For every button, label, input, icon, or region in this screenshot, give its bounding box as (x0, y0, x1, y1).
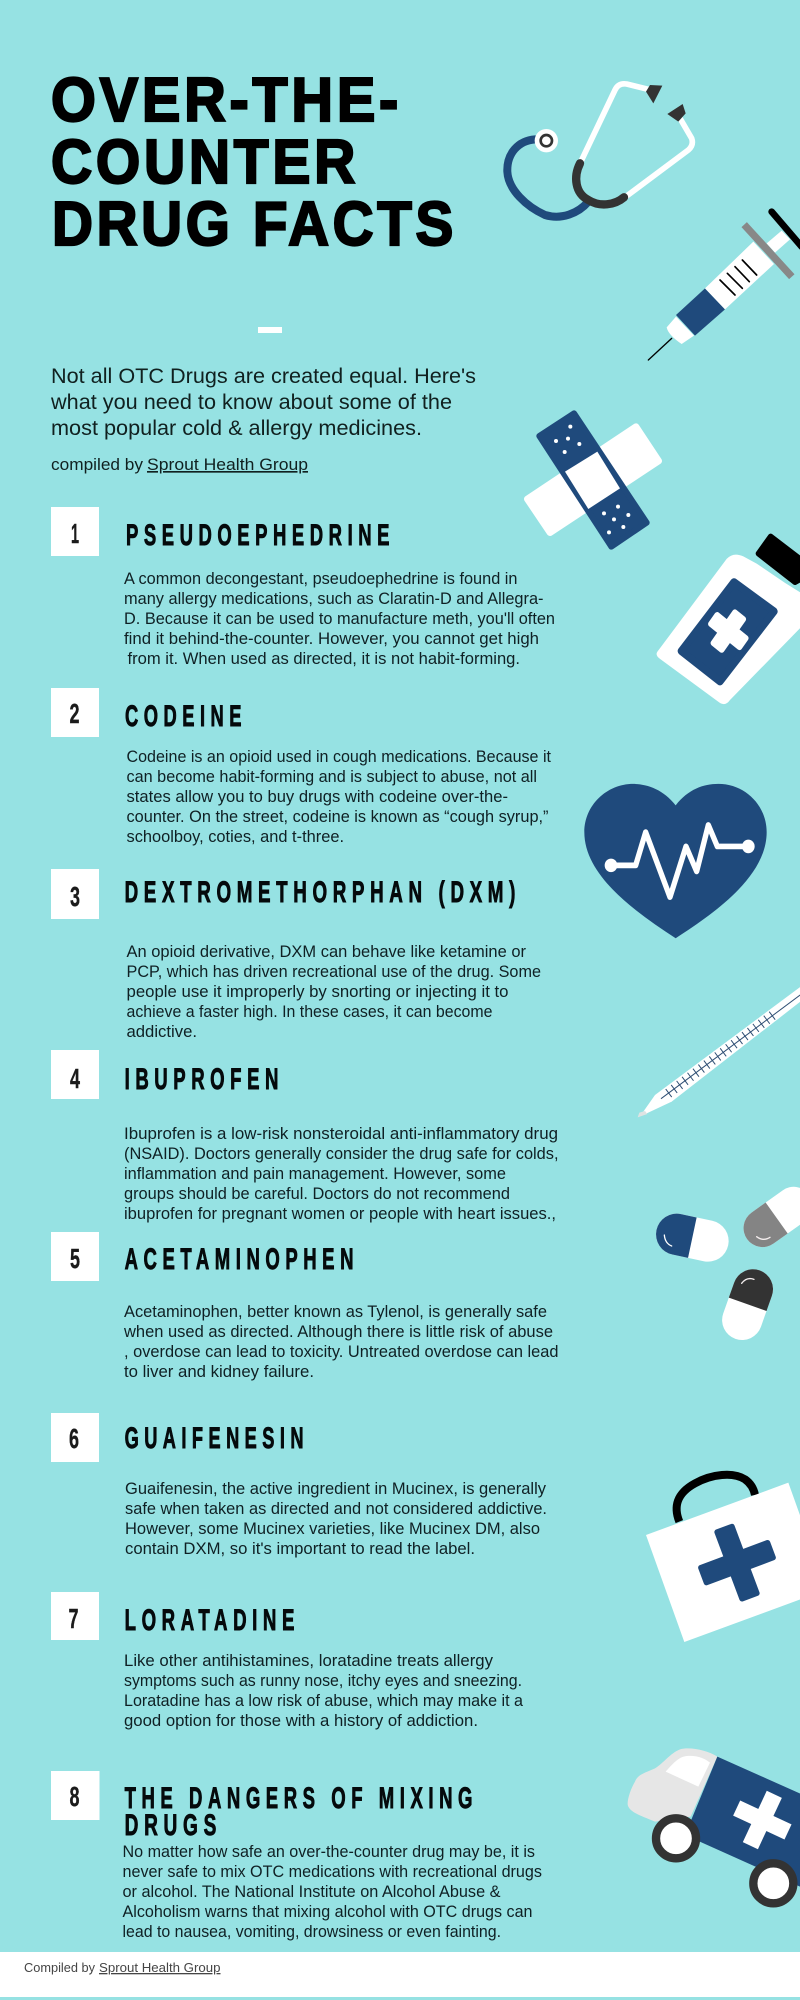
number badge 4: 4 (70, 1063, 80, 1094)
body text 4 (124, 1125, 558, 1223)
number badge 4 (51, 1050, 99, 1099)
heading 5: ACETAMINOPHEN (125, 1243, 359, 1276)
body text 8: Alcoholism warns that mixing alcohol with OTC drugs can (122, 1903, 532, 1921)
body text 5: , overdose can lead to toxicity. Untreated overdose can lead (124, 1343, 558, 1361)
body text 2: states allow you to buy drugs with codeine over-the- (126, 788, 508, 806)
number badge 5 (51, 1232, 99, 1281)
icon: grey capsule (736, 1179, 800, 1255)
body text 6: Guaifenesin, the active ingredient in Mucinex, is generally (125, 1480, 547, 1498)
heading 4: IBUPROFEN (125, 1063, 284, 1096)
body text 3: PCP, which has driven recreational use of the drug. Some (126, 963, 541, 981)
intro text: what you need to know about some of the (50, 390, 452, 414)
body text 5: when used as directed. Although there is little risk of abuse (123, 1323, 553, 1341)
body text 3: An opioid derivative, DXM can behave like ketamine or (126, 943, 526, 961)
white dash accent (258, 327, 282, 333)
title (51, 66, 457, 259)
section 7: loratadine (51, 1592, 524, 1730)
heading 3: DEXTROMETHORPHAN (DXM) (125, 876, 521, 909)
body text 5: to liver and kidney failure. (124, 1363, 314, 1381)
section 2: codeine (51, 688, 551, 846)
body text 4: (NSAID). Doctors generally consider the drug safe for colds, (124, 1145, 558, 1163)
heading 8: THE DANGERS OF MIXING (125, 1782, 478, 1815)
body text 7: Like other antihistamines, loratadine treats allergy (124, 1652, 494, 1670)
section 8: the dangers of mixing drugs (51, 1771, 542, 1941)
body text 6: However, some Mucinex varieties, like Mucinex DM, also (125, 1520, 540, 1538)
body text 8 (122, 1843, 542, 1941)
heading 6: GUAIFENESIN (125, 1422, 309, 1455)
body text 2: schoolboy, coties, and t-three. (126, 828, 344, 846)
number badge 5: 5 (70, 1243, 80, 1274)
body text 7: symptoms such as runny nose, itchy eyes and sneezing. (124, 1672, 522, 1690)
section 5: acetaminophen (51, 1232, 558, 1381)
heading 8 (125, 1782, 478, 1842)
number badge 7 (51, 1592, 99, 1640)
body text 3: achieve a faster high. In these cases, it can become (126, 1003, 492, 1021)
footer band: Sprout Health Group (99, 1960, 220, 1975)
icon: medicine bottle (657, 536, 800, 704)
heading 2: CODEINE (125, 700, 247, 733)
body text 5 (123, 1303, 558, 1381)
body text 8: No matter how safe an over-the-counter drug may be, it is (122, 1843, 535, 1861)
icon: bandage (527, 413, 659, 547)
body text 2: can become habit-forming and is subject to abuse, not all (126, 768, 537, 786)
heading 7: LORATADINE (125, 1604, 300, 1637)
icon: blue capsule (652, 1210, 732, 1266)
number badge 8: 8 (70, 1781, 80, 1812)
title: COUNTER (51, 128, 359, 197)
body text 4: inflammation and pain management. However, some (124, 1165, 506, 1183)
icon: thermometer (638, 985, 800, 1117)
body text 6 (125, 1480, 547, 1558)
heading 8: DRUGS (125, 1809, 222, 1842)
number badge 1 (51, 507, 99, 556)
number badge 2: 2 (70, 698, 80, 729)
body text 3: people use it improperly by snorting or injecting it to (126, 983, 509, 1001)
body text 1: A common decongestant, pseudoephedrine is found in (124, 570, 518, 588)
body text 6: safe when taken as directed and not considered addictive. (125, 1500, 547, 1518)
body text 2 (126, 748, 551, 846)
icon: black capsule (717, 1264, 779, 1346)
body text 1: D. Because it can be used to manufacture meth, you'll often (124, 610, 555, 628)
number badge 3: 3 (70, 881, 80, 912)
body text 3 (126, 943, 541, 1041)
title: OVER-THE- (51, 66, 402, 135)
body text 7: Loratadine has a low risk of abuse, which may make it a (124, 1692, 524, 1710)
section 6: guaifenesin (51, 1413, 547, 1558)
body text 8: or alcohol. The National Institute on Alcohol Abuse & (122, 1883, 500, 1901)
body text 1: from it. When used as directed, it is not habit-forming. (128, 650, 520, 668)
number badge 3 (51, 869, 99, 919)
body text 8: never safe to mix OTC medications with recreational drugs (122, 1863, 542, 1881)
footer band: Compiled by (24, 1960, 95, 1975)
icon: stethoscope (507, 84, 692, 217)
intro text (50, 364, 476, 440)
body text 1: many allergy medications, such as Claratin-D and Allegra- (124, 590, 544, 608)
body text 4: Ibuprofen is a low-risk nonsteroidal anti-inflammatory drug (124, 1125, 558, 1143)
number badge 1: 1 (71, 518, 79, 549)
body text 4: ibuprofen for pregnant women or people with heart issues., (124, 1205, 556, 1223)
body text 7 (124, 1652, 524, 1730)
compiled by credit: compiled by (51, 456, 144, 474)
number badge 2 (51, 688, 99, 737)
body text 3: addictive. (126, 1023, 197, 1041)
body text 1: find it behind-the-counter. However, you cannot get high (124, 630, 539, 648)
number badge 6: 6 (69, 1423, 79, 1454)
intro text: Not all OTC Drugs are created equal. Here's (51, 364, 476, 388)
body text 7: good option for those with a history of addiction. (124, 1712, 478, 1730)
body text 4: groups should be careful. Doctors do not recommend (124, 1185, 510, 1203)
compiled by credit: Sprout Health Group (147, 456, 308, 474)
number badge 8 (51, 1771, 100, 1820)
body text 1 (124, 570, 555, 668)
icon: first aid kit (646, 1475, 800, 1642)
title: DRUG FACTS (52, 190, 457, 259)
section 3: dextromethorphan (51, 869, 541, 1041)
body text 6: contain DXM, so it's important to read the label. (125, 1540, 475, 1558)
intro text: most popular cold & allergy medicines. (51, 416, 422, 440)
number badge 7: 7 (68, 1603, 78, 1634)
footer band (0, 1952, 800, 1997)
section 4: ibuprofen (51, 1050, 558, 1223)
body text 8: lead to nausea, vomiting, drowsiness or even fainting. (122, 1923, 501, 1941)
section 1: pseudoephedrine (51, 507, 555, 668)
icon: ambulance (628, 1748, 800, 1903)
number badge 6 (51, 1413, 99, 1462)
icon: heart with pulse line (584, 784, 767, 938)
body text 5: Acetaminophen, better known as Tylenol, is generally safe (124, 1303, 547, 1321)
body text 2: counter. On the street, codeine is known as “cough syrup,” (126, 808, 548, 826)
heading 1: PSEUDOEPHEDRINE (126, 519, 395, 552)
body text 2: Codeine is an opioid used in cough medications. Because it (126, 748, 551, 766)
icon: syringe (648, 212, 800, 360)
compiled by credit (51, 456, 308, 474)
